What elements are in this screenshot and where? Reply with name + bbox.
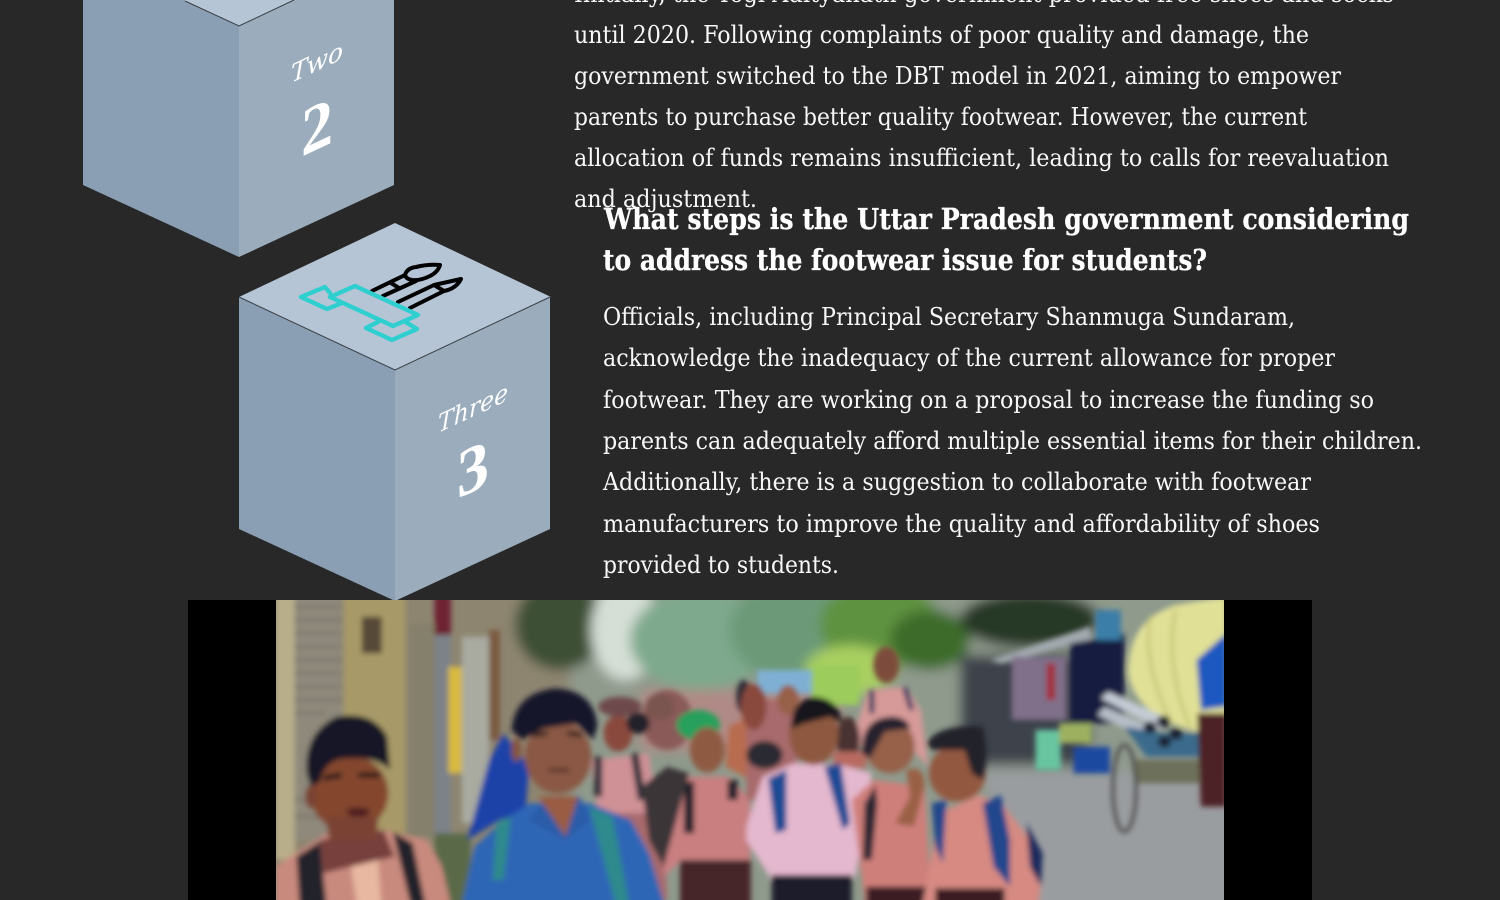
text block: officials' proposal: provided to students. xyxy=(603,551,839,579)
boy lilac shirt xyxy=(746,763,872,880)
left half, coordinates from crop xyxy=(275,593,751,900)
distant kids xyxy=(746,700,797,800)
cube: step two xyxy=(83,0,395,257)
photo: schoolchildren walking on a street xyxy=(188,570,1312,900)
text block: officials' proposal: Additionally, there is a suggestion to collaborate with footwear xyxy=(602,468,1311,496)
text block: footwear scheme history xyxy=(574,0,1394,213)
number: 3: 3 xyxy=(457,424,489,514)
text block: officials' proposal: parents can adequately afford multiple essential items for their children. xyxy=(603,427,1422,455)
boy in profile xyxy=(921,795,1041,900)
text block: footwear scheme history: and adjustment. xyxy=(574,185,757,213)
cart xyxy=(1128,597,1226,732)
text block: footwear scheme history: parents to purchase better quality footwear. However, the current xyxy=(574,103,1307,131)
heading: government steps question xyxy=(603,202,1409,277)
boy 2 xyxy=(460,803,667,900)
label: Two: Two xyxy=(291,37,343,90)
cube: step three xyxy=(239,223,551,601)
boy looking up xyxy=(852,780,932,900)
label: Three: Three xyxy=(438,378,508,440)
text block: footwear scheme history: allocation of funds remains insufficient, leading to calls for reevaluation xyxy=(574,144,1389,172)
text block: officials' proposal: manufacturers to improve the quality and affordability of shoes xyxy=(603,510,1320,538)
text block: officials' proposal: Officials, including Principal Secretary Shanmuga Sundaram, xyxy=(603,303,1295,331)
text block: officials' proposal: footwear. They are working on a proposal to increase the funding so xyxy=(603,386,1374,414)
heading: government steps question: to address the footwear issue for students? xyxy=(603,243,1207,277)
boy 1 xyxy=(275,830,453,900)
text block: officials' proposal xyxy=(602,303,1422,579)
photo background: street, shops and trees xyxy=(276,600,1224,900)
text block: footwear scheme history: until 2020. Following complaints of poor quality and damage, the xyxy=(574,21,1309,49)
text block: officials' proposal: acknowledge the inadequacy of the current allowance for proper xyxy=(603,344,1335,372)
right half, coordinates from crop xyxy=(741,597,1226,900)
number: 2: 2 xyxy=(301,82,333,172)
text block: footwear scheme history: government switched to the DBT model in 2021, aiming to empower xyxy=(574,62,1341,90)
icon: paint brushes and ruler xyxy=(301,265,461,340)
backpack behind blue-shirt boy xyxy=(467,733,529,840)
distant kids xyxy=(604,715,633,752)
